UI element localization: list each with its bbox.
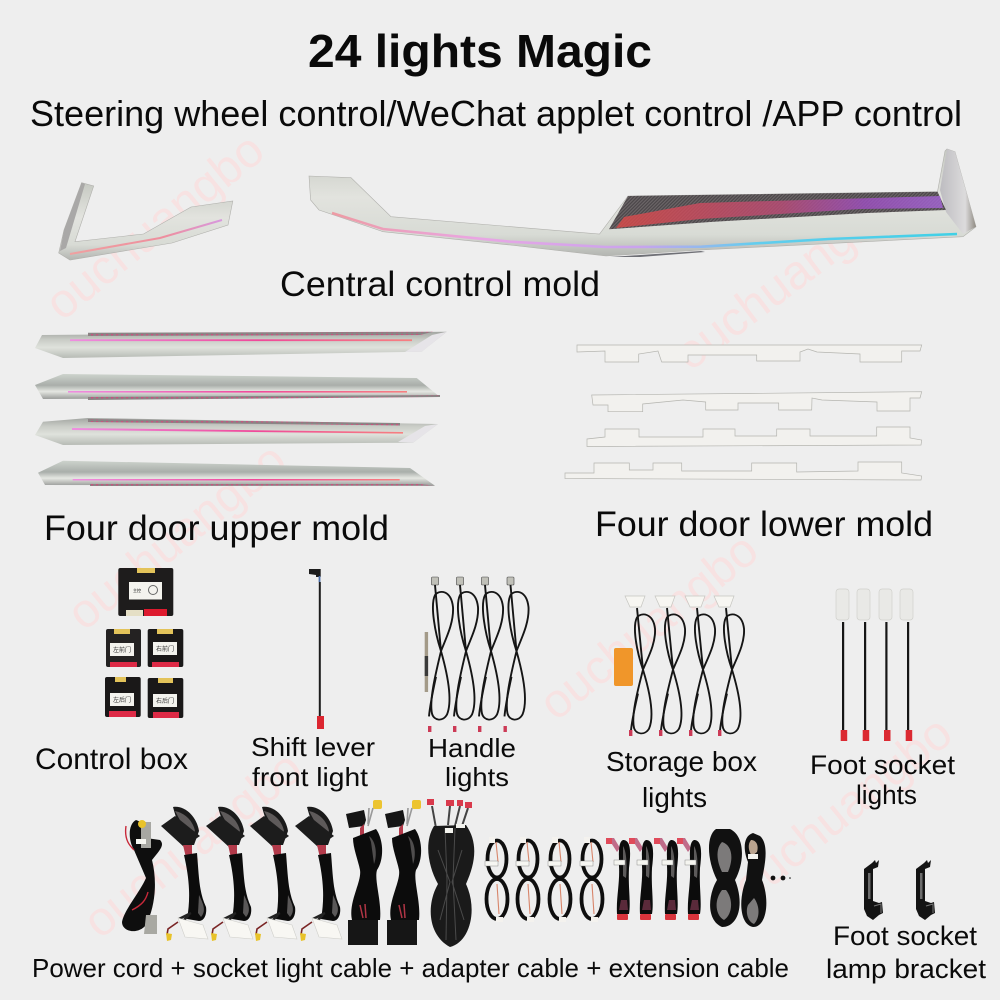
control boxes	[105, 568, 183, 718]
label: storage box lights	[606, 746, 757, 813]
door control box: right rear	[148, 678, 183, 718]
glowing panel	[616, 196, 943, 228]
lower mold 2	[592, 392, 922, 412]
subtitle: Steering wheel control/WeChat applet control /APP control	[30, 93, 962, 134]
door mold 4	[38, 461, 435, 486]
door control box: left rear	[105, 677, 141, 717]
label: cable list: Power cord + socket light cable + adapter cable + extension cable	[32, 953, 789, 983]
label: foot socket lights: lights	[856, 780, 917, 810]
watermarks: ouchuangbo	[530, 523, 768, 731]
label: foot socket lamp bracket: Foot socket	[833, 921, 978, 951]
door control box: left front: 左前门	[113, 646, 131, 654]
loop cable 1	[485, 837, 508, 922]
loop cable 3	[548, 837, 570, 922]
handle light 3	[478, 577, 503, 732]
lower mold 3	[587, 427, 922, 446]
label: handle lights: lights	[445, 762, 509, 792]
loop cable 2	[516, 837, 538, 922]
door control box: right front	[148, 629, 183, 667]
power cord bundle	[122, 820, 162, 934]
storage light 4	[714, 596, 744, 736]
bracket 1	[864, 860, 883, 920]
label: shift lever front light	[251, 732, 375, 792]
socket cable 2	[206, 807, 253, 941]
LED strip	[332, 213, 957, 247]
slim cable 4	[677, 838, 701, 920]
door control box: right rear: 右后门	[156, 697, 174, 705]
handle light 4	[504, 577, 529, 732]
foot light 2	[857, 589, 870, 741]
carbon fibre panel	[609, 192, 946, 229]
label: storage box lights: Storage box	[606, 746, 757, 777]
socket cable 1	[161, 807, 208, 941]
main central control mold	[309, 149, 976, 257]
heading: four door lower mold: Four door lower mold	[595, 505, 933, 544]
four door lower mold parts	[565, 345, 922, 480]
label: handle lights	[428, 733, 516, 792]
watermarks: ouchuangbo	[724, 706, 962, 914]
foot light 1	[836, 589, 849, 741]
heading: central control mold: Central control mold	[280, 265, 600, 304]
label: shift lever front light: Shift lever	[251, 732, 375, 762]
adapter cable 1	[346, 800, 382, 945]
long slim cables	[606, 838, 701, 920]
title: 24 lights Magic	[308, 25, 652, 77]
slim cable 3	[654, 838, 678, 920]
storage light 1	[625, 596, 655, 736]
door control box: left rear: 左后门	[113, 696, 131, 704]
adapter cable 2	[385, 800, 421, 945]
heading: four door upper mold: Four door upper mold	[44, 509, 389, 548]
storage box lights	[614, 596, 744, 736]
label: shift lever front light: front light	[252, 762, 369, 792]
tool stick	[425, 632, 428, 692]
label: foot socket lights	[810, 750, 956, 810]
door mold 2	[35, 374, 440, 400]
orange module	[614, 648, 633, 686]
socket cable 3	[250, 807, 297, 941]
label: control box: Control box	[35, 743, 188, 776]
extension cable coil	[427, 799, 474, 947]
door mold 1	[35, 332, 447, 358]
storage light 3	[685, 596, 715, 736]
label: foot socket lamp bracket: lamp bracket	[826, 954, 987, 984]
watermarks: ouchuangbo	[665, 179, 908, 381]
left central control mold	[59, 183, 233, 260]
label: storage box lights: lights	[642, 782, 707, 813]
watermarks: ouchuangbo	[36, 123, 274, 331]
foot socket lights	[836, 589, 913, 741]
lower mold 4	[565, 462, 922, 480]
label: handle lights: Handle	[428, 733, 516, 763]
main control box	[118, 568, 173, 616]
handle light 2	[453, 577, 478, 732]
figure-eight extension cables	[485, 837, 602, 922]
slim cable 1	[606, 838, 630, 920]
handle light 1	[428, 577, 453, 732]
watermarks: ouchuangbo	[58, 433, 296, 641]
storage light 2	[655, 596, 685, 736]
foot light 3	[879, 589, 892, 741]
lower mold 1	[577, 345, 922, 362]
main control box: 主控	[133, 587, 141, 593]
door control box: left front	[106, 629, 141, 667]
slim cable 2	[629, 838, 653, 920]
socket cable 4	[295, 807, 342, 941]
label: foot socket lamp bracket	[826, 921, 987, 984]
shift lever front light	[309, 569, 324, 729]
loop cable 4	[580, 837, 602, 922]
socket light cables	[161, 807, 342, 941]
label: foot socket lights: Foot socket	[810, 750, 956, 780]
door mold 3	[35, 418, 438, 445]
ellipsis dots	[771, 876, 791, 880]
large coiled cables	[709, 829, 766, 927]
watermarks: ouchuangbo	[74, 741, 312, 949]
foot socket lamp brackets	[864, 860, 935, 920]
watermarks	[36, 123, 962, 949]
adapter cables	[346, 800, 421, 945]
door control box: right front: 右前门	[156, 645, 174, 653]
four door upper mold parts	[35, 332, 447, 486]
bracket 2	[916, 860, 935, 920]
foot light 4	[900, 589, 913, 741]
handle lights	[425, 577, 529, 732]
